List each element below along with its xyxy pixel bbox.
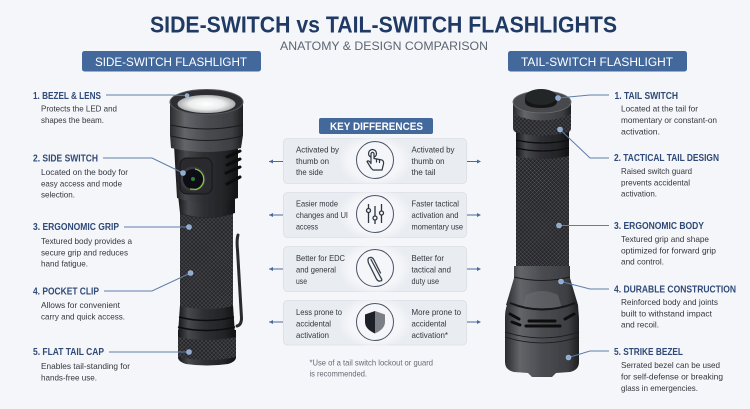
row: use case: use xyxy=(296,276,307,286)
row: activation: thumb on xyxy=(412,156,445,166)
knurled grip xyxy=(180,214,233,309)
head vents xyxy=(510,314,574,326)
heading: side-switch flashlight xyxy=(82,51,261,72)
callout 2: tactical tail design: prevents accidental xyxy=(621,178,690,188)
vents xyxy=(226,151,240,184)
row: mode changes xyxy=(269,188,481,240)
left callouts xyxy=(33,91,193,382)
callout 2: side switch xyxy=(33,154,186,200)
row: mode changes: Easier mode xyxy=(296,198,338,208)
row: activation: Activated by xyxy=(412,144,455,154)
row: use case: Better for EDC xyxy=(296,253,345,263)
callout 1: bezel and lens: shapes the beam. xyxy=(41,115,104,125)
callout 1: tail switch xyxy=(556,91,717,136)
tail collar xyxy=(178,305,235,337)
row: mode changes: Faster tactical xyxy=(412,198,459,208)
row: accidental activation: accidental xyxy=(412,318,447,328)
callout 2: side switch: 2. SIDE SWITCH xyxy=(33,154,98,164)
row: use case: Better for xyxy=(412,253,444,263)
row: use case: tactical and xyxy=(412,264,451,274)
row: use case xyxy=(269,242,481,294)
callout 1: tail switch: Located at the tail for xyxy=(621,104,698,114)
callout 3: ergonomic body: and control. xyxy=(621,256,664,266)
row: activation: thumb on xyxy=(296,156,329,166)
callout 5: strike bezel xyxy=(566,347,723,393)
row: mode changes: changes and UI xyxy=(296,210,348,220)
tail button xyxy=(525,97,557,108)
callout 5: flat tail cap: hands-free use. xyxy=(41,372,97,382)
tail cap xyxy=(178,330,236,366)
callout 2: tactical tail design: 2. TACTICAL TAIL DESIGN xyxy=(614,153,719,164)
neck xyxy=(516,130,569,159)
callout 4: pocket clip: carry and quick access. xyxy=(41,312,125,322)
callout 3: ergonomic grip: hand fatigue. xyxy=(41,258,88,268)
callout 4: durable construction: 4. DURABLE CONSTRUCTION xyxy=(614,284,736,296)
callout 2: side switch: Located on the body for xyxy=(41,167,128,177)
callout 5: strike bezel: for self-defense or breaking xyxy=(621,372,723,382)
callout 1: tail switch: 1. TAIL SWITCH xyxy=(614,91,678,102)
pocket clip xyxy=(237,235,242,326)
row: accidental activation xyxy=(269,296,481,348)
callout 5: strike bezel: glass in emergencies. xyxy=(621,383,698,393)
body underlay xyxy=(180,200,233,330)
callout 4: pocket clip: 4. POCKET CLIP xyxy=(33,286,99,298)
row: accidental activation: Less prone to xyxy=(296,307,342,317)
neck collar xyxy=(178,195,235,218)
callout 3: ergonomic grip: 3. ERGONOMIC GRIP xyxy=(33,222,119,233)
right callouts xyxy=(556,91,736,393)
icon: pointing hand xyxy=(367,150,384,170)
callout 1: bezel and lens: Protects the LED and xyxy=(41,104,117,114)
callout 1: tail switch: activation. xyxy=(621,126,660,136)
footnote: is recommended. xyxy=(310,368,367,378)
flared neck xyxy=(506,266,578,312)
callout 5: flat tail cap: 5. FLAT TAIL CAP xyxy=(33,347,104,358)
row: mode changes: activation and xyxy=(412,210,459,220)
row: use case: and general xyxy=(296,264,336,274)
row: activation: the tail xyxy=(412,167,436,177)
body underlay xyxy=(516,120,569,280)
bezel xyxy=(170,90,243,114)
icon: shield xyxy=(365,311,385,334)
callout 1: tail switch: momentary or constant-on xyxy=(621,115,717,125)
icon: sliders xyxy=(366,204,384,224)
row: accidental activation: accidental xyxy=(296,318,331,328)
callout 2: tactical tail design: Raised switch guard xyxy=(621,166,692,176)
lens xyxy=(178,95,236,113)
callout 5: strike bezel: Serrated bezel can be used xyxy=(621,360,720,370)
subtitle: ANATOMY & DESIGN COMPARISON xyxy=(280,39,488,53)
key differences heading xyxy=(319,118,433,134)
row: activation xyxy=(269,134,481,186)
callout 3: ergonomic grip xyxy=(33,222,192,268)
callout 5: strike bezel: 5. STRIKE BEZEL xyxy=(614,347,683,358)
callout 2: side switch: easy access and mode xyxy=(41,178,122,188)
callout 1: bezel and lens: 1. BEZEL & LENS xyxy=(33,91,101,102)
head xyxy=(170,102,243,152)
head xyxy=(505,305,579,377)
callout 4: durable construction: and recoil. xyxy=(621,320,659,330)
row: accidental activation: More prone to xyxy=(412,307,461,317)
heading: tail-switch flashlight xyxy=(508,51,687,72)
callout 2: tactical tail design: activation. xyxy=(621,188,657,198)
callout 2: tactical tail design xyxy=(558,127,719,198)
footnote: *Use of a tail switch lockout or guard xyxy=(310,358,433,368)
callout 2: side switch: selection. xyxy=(41,190,75,200)
illustration: tail-switch flashlight xyxy=(505,89,579,377)
icon: pocket clip xyxy=(368,257,382,281)
callout 4: durable construction: built to withstand impact xyxy=(621,308,713,318)
callout 4: pocket clip: Allows for convenient xyxy=(41,300,121,310)
callout 1: bezel and lens xyxy=(33,91,189,125)
callout 3: ergonomic body xyxy=(556,221,716,266)
knurled ring xyxy=(513,112,571,136)
tail ring xyxy=(513,102,571,120)
row: use case: duty use xyxy=(412,276,439,286)
row: accidental activation: activation xyxy=(296,330,329,340)
row: mode changes: access xyxy=(296,222,318,232)
row: activation: Activated by xyxy=(296,144,340,154)
callout 3: ergonomic body: optimized for forward grip xyxy=(621,246,716,256)
title: SIDE-SWITCH vs TAIL-SWITCH FLASHLIGHTS xyxy=(150,12,617,38)
illustration: side-switch flashlight xyxy=(170,90,243,366)
row: accidental activation: activation* xyxy=(412,330,449,340)
heading: tail-switch flashlight: TAIL-SWITCH FLASHLIGHT xyxy=(521,55,673,69)
head lower xyxy=(174,145,238,203)
callout 4: pocket clip xyxy=(33,270,193,322)
side switch xyxy=(180,158,212,194)
callout 3: ergonomic body: 3. ERGONOMIC BODY xyxy=(614,221,704,232)
row: activation: the side xyxy=(296,167,323,177)
callout 5: flat tail cap: Enables tail-standing for xyxy=(41,361,130,371)
row: mode changes: momentary use xyxy=(412,222,463,232)
callout 4: durable construction: Reinforced body and joints xyxy=(621,297,718,307)
callout 3: ergonomic grip: Textured body provides a xyxy=(41,236,132,246)
key differences heading: KEY DIFFERENCES xyxy=(330,121,423,133)
callout 5: flat tail cap xyxy=(33,347,192,382)
footnote xyxy=(310,358,433,378)
callout 3: ergonomic body: Textured grip and shape xyxy=(621,234,709,244)
heading: side-switch flashlight: SIDE-SWITCH FLASHLIGHT xyxy=(95,55,247,69)
callout 4: durable construction xyxy=(558,279,736,330)
knurled body xyxy=(516,155,569,266)
callout 3: ergonomic grip: secure grip and reduces xyxy=(41,248,128,258)
